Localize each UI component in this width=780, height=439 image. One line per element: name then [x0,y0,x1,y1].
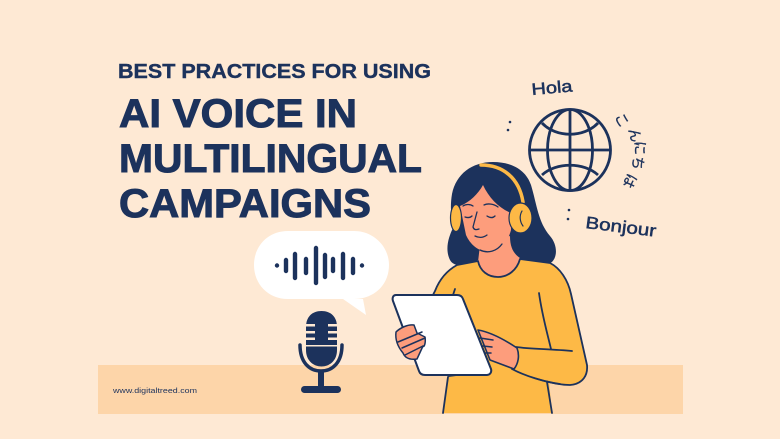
label: Japanese greeting [612,110,648,191]
heading: title: AI VOICE IN [119,92,357,136]
heading: title [119,92,422,226]
face [460,185,511,252]
heading: subtitle: BEST PRACTICES FOR USING [118,61,431,83]
tablet [393,295,491,375]
sweater body [443,360,552,413]
hair [447,162,556,265]
headphones [450,165,532,233]
sweater [420,259,587,385]
label: Japanese greeting: に [632,141,648,155]
sweater folds [443,289,572,413]
label: Japanese greeting: は [620,171,640,191]
left hand [396,325,425,359]
woman with headphones and tablet [393,162,587,413]
sound wave [277,248,362,283]
heading: title: CAMPAIGNS [119,182,371,226]
icon: globe [530,110,610,190]
decorative dots [507,121,570,220]
label: Hola: Hola [531,77,574,99]
neck [478,236,520,277]
right hand [478,330,518,369]
heading: title: MULTILINGUAL [119,137,422,181]
label: Japanese greeting: ち [629,155,647,171]
label: Japanese greeting: ん [625,126,645,144]
icon: microphone [300,311,342,393]
face details [463,204,502,252]
label: Japanese greeting: こ [612,110,632,130]
speech bubble with sound wave [254,231,389,315]
finger lines [398,332,493,355]
floor band [98,365,683,414]
label: Bonjour: Bonjour [585,213,658,241]
website url: www.digitaltreed.com [112,386,197,395]
